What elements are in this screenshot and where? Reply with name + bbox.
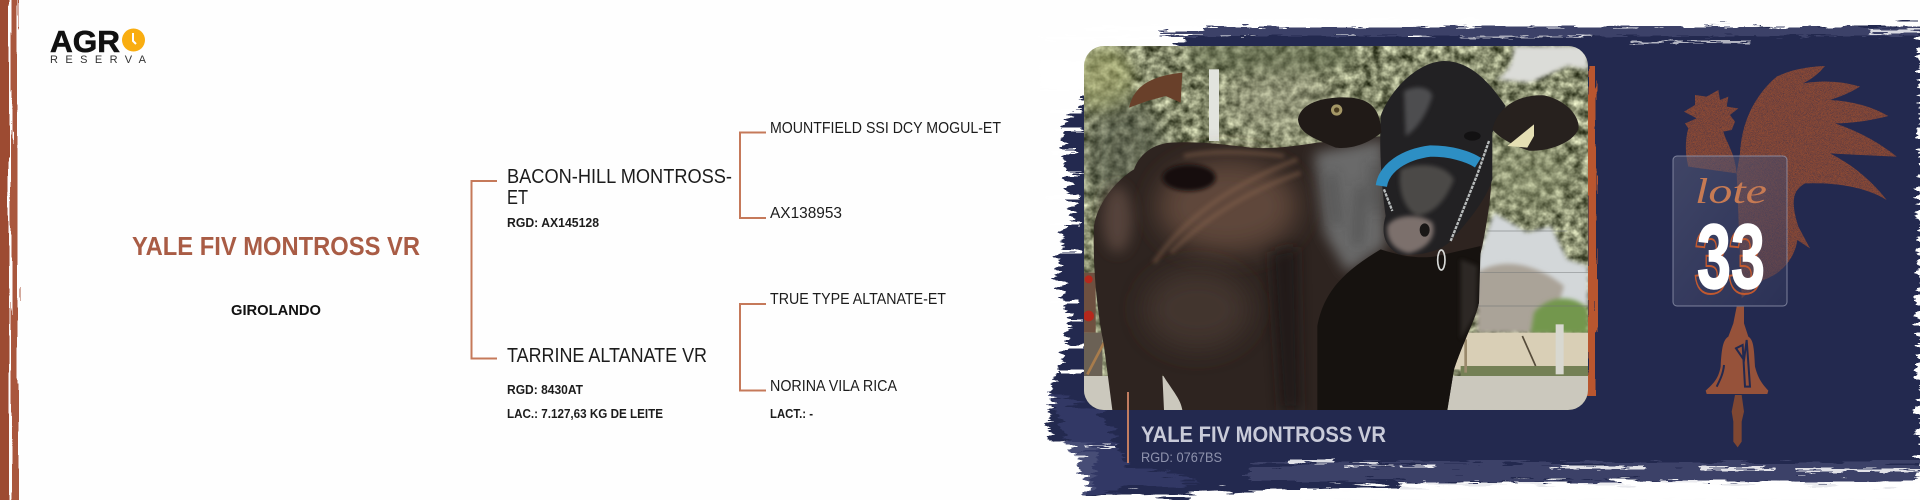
right ear <box>1492 95 1579 151</box>
lot card <box>1673 156 1787 313</box>
grandparents: MOUNTFIELD SSI DCY MOGUL-ET <box>770 120 1001 137</box>
dark chest <box>1317 246 1481 410</box>
bracket: maternal grandparents <box>740 304 766 390</box>
sire <box>507 166 732 230</box>
foliage background <box>1084 46 1588 410</box>
rooster and bell emblem <box>1684 66 1897 447</box>
bracket: paternal grandparents <box>740 132 766 218</box>
foliage tone patches <box>1074 46 1134 113</box>
logo: Agro Reserva <box>50 24 147 66</box>
dam <box>507 345 707 421</box>
lote label: lote <box>1695 171 1767 211</box>
rooster <box>1684 66 1897 298</box>
dam: RGD: 8430AT <box>507 383 583 397</box>
bracket: parents <box>472 181 497 358</box>
rust strip beside photo <box>1588 66 1596 396</box>
navy brushed panel <box>1040 19 1920 500</box>
grandparents <box>770 120 1001 421</box>
lighter bottom brush area <box>1048 392 1200 494</box>
logo: Agro Reserva: RESERVA <box>50 54 147 66</box>
sire: RGD: AX145128 <box>507 216 599 230</box>
caption under photo <box>1127 392 1386 465</box>
caption under photo: RGD: 0767BS <box>1141 449 1222 465</box>
muzzle <box>1387 216 1434 253</box>
grandparents: TRUE TYPE ALTANATE-ET <box>770 291 946 308</box>
caption under photo: YALE FIV MONTROSS VR <box>1141 422 1386 447</box>
cow head <box>1298 61 1579 270</box>
bell highlights <box>1717 340 1750 387</box>
dam: TARRINE ALTANATE VR <box>507 345 707 367</box>
halter <box>1381 151 1478 186</box>
cow photograph <box>1074 36 1588 410</box>
main animal name: YALE FIV MONTROSS VR <box>132 233 420 261</box>
breed label: GIROLANDO <box>231 302 321 319</box>
caption accent line <box>1127 392 1129 463</box>
halter chain <box>1384 141 1489 241</box>
left ear <box>1298 97 1381 148</box>
white brush streaks <box>1040 19 1920 500</box>
rust brush strip on left edge <box>0 0 18 500</box>
cow body <box>1094 136 1492 410</box>
chin ring <box>1438 250 1445 270</box>
lot number: 33 <box>1697 206 1765 308</box>
bell <box>1706 307 1768 394</box>
sire: ET <box>507 187 528 209</box>
bell clapper <box>1732 395 1744 447</box>
grandparents: LACT.: - <box>770 407 813 421</box>
logo: Agro Reserva: AGR <box>50 24 120 59</box>
grandparents: NORINA VILA RICA <box>770 378 897 395</box>
grey shoulder <box>1314 139 1386 273</box>
pedigree tree <box>472 120 1001 421</box>
lot number outline shadow: 33 <box>1694 211 1762 313</box>
grandparents: AX138953 <box>770 205 842 222</box>
sire: BACON-HILL MONTROSS- <box>507 166 732 188</box>
dam: LAC.: 7.127,63 KG DE LEITE <box>507 407 663 421</box>
sky and background landscape <box>1074 36 1588 410</box>
